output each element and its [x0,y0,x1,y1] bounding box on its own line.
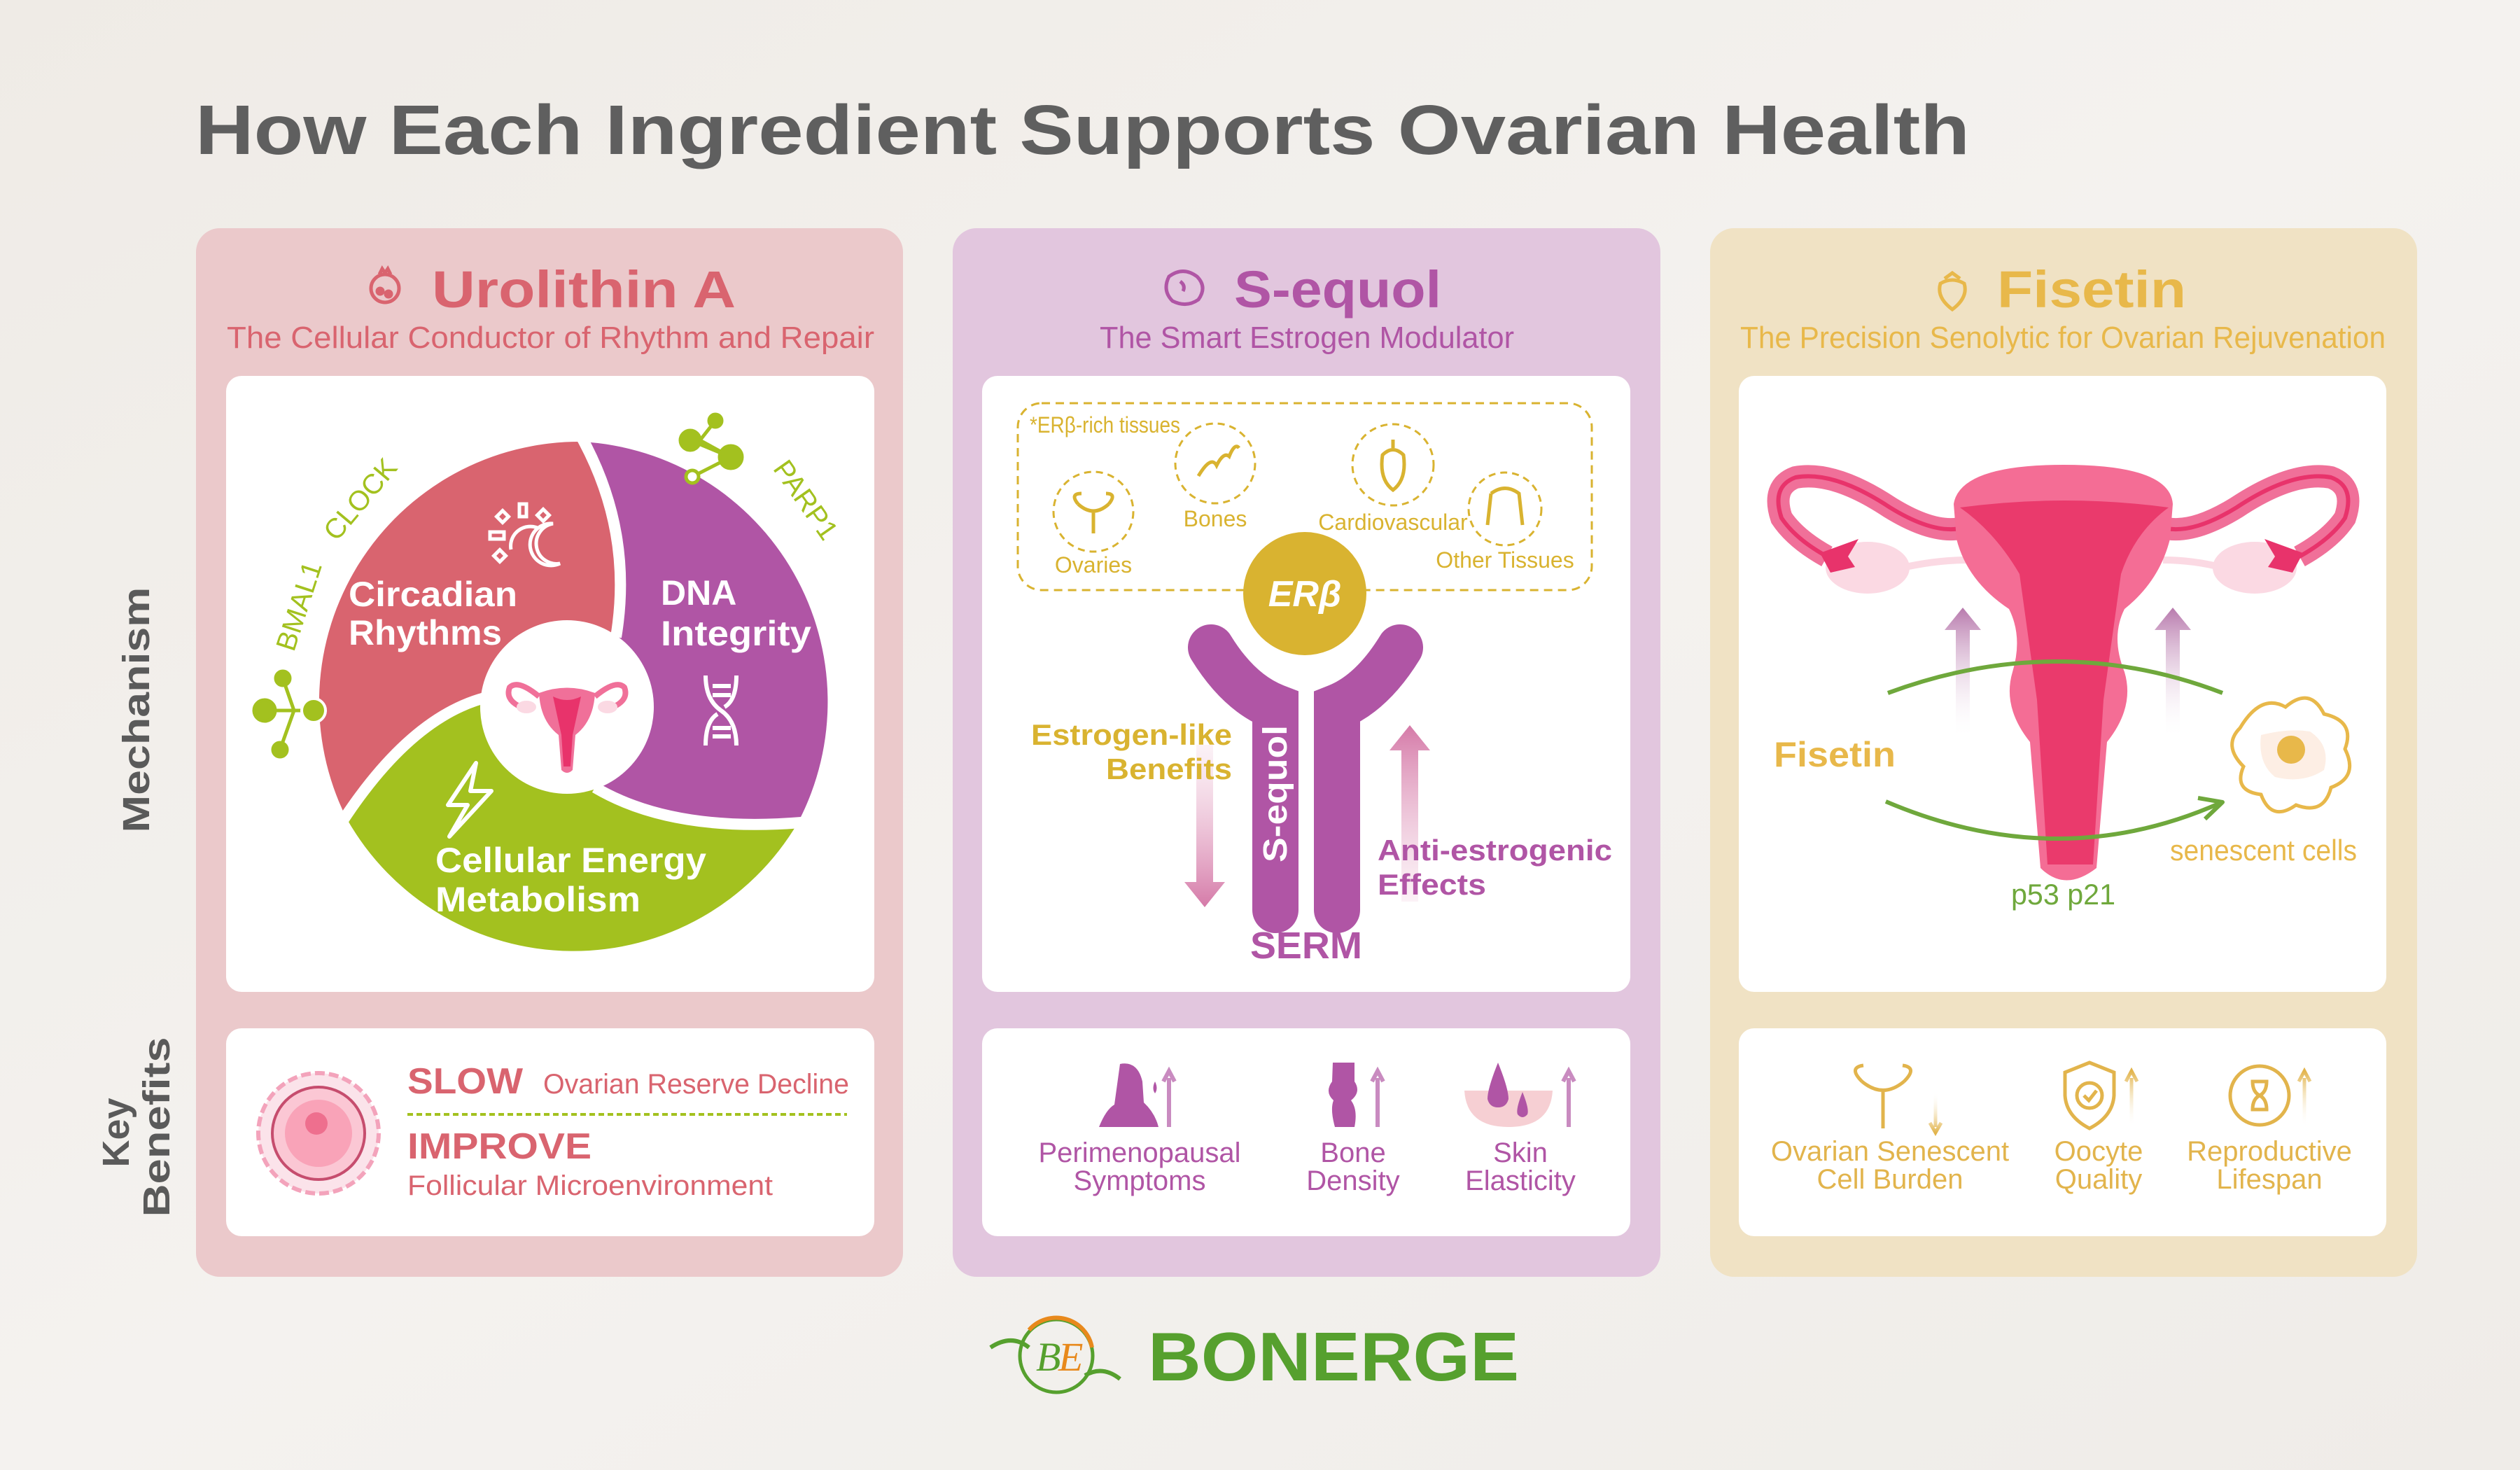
text: Cellular Energy Metabolism: Cellular Energy [435,841,706,880]
icon: shield [2065,1063,2137,1128]
illustration: uterus [1778,465,2348,881]
benefits card: Urolithin A: Ovarian Reserve Decline [543,1069,849,1100]
benefit labels: Oocyte [2054,1136,2143,1167]
text: SLOW: SLOW [407,1061,524,1102]
arrows: up [1945,608,1981,740]
benefit labels: Elasticity [1465,1166,1576,1196]
dashed tissue box: Bones [1184,506,1247,531]
dashed tissue box: *ERβ-rich tissues [1030,412,1180,438]
text: p53 p21: p53 p21 [2011,878,2115,911]
benefits card: Urolithin A [226,1028,874,1236]
arrow: up [1390,725,1430,902]
text: Circadian Rhythms: Circadian [349,575,517,614]
text: IMPROVE: IMPROVE [407,1126,592,1167]
ERβ circle [1243,532,1366,655]
receptor: SERM: SERM [1250,925,1362,967]
text: senescent cells: senescent cells [2170,834,2357,867]
icon: bean [1166,272,1203,304]
text: DNA Integrity: Integrity [661,614,811,653]
icon: ovary outline [1855,1065,1941,1133]
subtitle: The Precision Senolytic for Ovarian Rejuvenation [1740,321,2386,355]
icon: molecules [254,414,742,757]
benefit labels: Density [1306,1166,1400,1196]
benefits card: S-equol [982,1028,1630,1236]
text: DNA Integrity [661,573,811,653]
dashed tissue box: Cardiovascular [1318,510,1468,535]
icon: hourglass circle [2230,1066,2310,1127]
mechanism card [1739,376,2386,992]
icon: strawberry [1940,273,1965,309]
panel: Fisetin [1710,228,2417,1277]
benefit labels: Symptoms [1074,1166,1205,1196]
green arcs [1886,662,2222,839]
benefits card: Urolithin A: Follicular Microenvironment [407,1170,773,1201]
text: Anti-estrogenic Effects [1378,834,1612,901]
heading: Fisetin: Fisetin [1997,260,2186,318]
logo: BONERGE: BONERGE [1148,1318,1519,1395]
dashed tissue box: Other Tissues [1436,547,1574,573]
benefit labels: Cell Burden [1816,1164,1963,1195]
logo: BONERGE: B [1036,1334,1060,1380]
gene labels [270,452,844,654]
icon: bone joint [1329,1063,1383,1127]
icon: lightning [448,763,491,836]
benefits card: Fisetin [1739,1028,2386,1236]
benefit labels: Skin [1493,1138,1548,1168]
icon: pomegranate [371,269,399,302]
ERβ circle: ERβ [1268,574,1341,615]
text: Anti-estrogenic Effects: Effects [1378,868,1486,901]
side label: Key Benefits: Key [95,1098,137,1168]
text: Cellular Energy Metabolism: Metabolism [435,880,640,919]
text: Fisetin: Fisetin [1774,735,1896,774]
text: Cellular Energy Metabolism [435,841,706,919]
benefit labels [1038,1138,1576,1196]
arrow: down [1184,745,1225,907]
text: Estrogen-like Benefits: Benefits [1106,752,1232,785]
benefit labels: Quality [2055,1164,2142,1195]
benefit labels: Ovarian Senescent [1771,1136,2009,1167]
gene labels: PARP1 [767,454,844,546]
text: Circadian Rhythms: Rhythms [349,613,502,652]
gene labels: CLOCK [318,452,403,547]
side label: Mechanism: Mechanism [115,587,158,833]
text: Circadian Rhythms [349,575,517,652]
title: How Each Ingredient Supports Ovarian Health [195,91,1970,169]
mechanism card [982,376,1630,992]
dashed tissue box: Ovaries [1055,552,1132,578]
icon: skin [1464,1063,1574,1127]
icon: follicle [258,1073,379,1194]
chart: circadian wheel [254,414,844,951]
icon: uterus center [508,685,626,773]
side label: Key Benefits: Benefits [136,1037,178,1217]
text: Estrogen-like Benefits [1031,718,1232,785]
text: Estrogen-like Benefits: Estrogen-like [1031,718,1232,751]
benefit labels: Bone [1320,1138,1386,1168]
subtitle: The Smart Estrogen Modulator [1100,321,1514,355]
dashed tissue box [1018,403,1592,590]
icon: DNA [706,676,736,746]
receptor: SERM [1211,648,1400,967]
benefit labels: Lifespan [2216,1164,2323,1195]
text: DNA Integrity: DNA [661,573,736,612]
receptor: SERM: S-equol [1257,725,1294,862]
gene labels: BMAL1 [270,558,328,654]
panel: S-equol [953,228,1660,1277]
panel: Urolithin A [196,228,903,1277]
side label: Key Benefits [95,1037,178,1217]
benefit labels: Perimenopausal [1038,1138,1241,1168]
logo: BONERGE: E [1058,1334,1083,1380]
benefit labels [1771,1136,2352,1195]
benefit labels: Reproductive [2187,1136,2352,1167]
heading: Urolithin A: Urolithin A [432,260,736,318]
text: Anti-estrogenic Effects: Anti-estrogenic [1378,834,1612,867]
icon: senescent cell [2232,698,2350,812]
logo: BONERGE [990,1318,1519,1395]
icon: woman [1099,1063,1175,1127]
subtitle: The Cellular Conductor of Rhythm and Repair [227,321,874,355]
heading: S-equol: S-equol [1234,260,1441,318]
icon: sun and moon [490,504,560,566]
mechanism card [226,376,874,992]
